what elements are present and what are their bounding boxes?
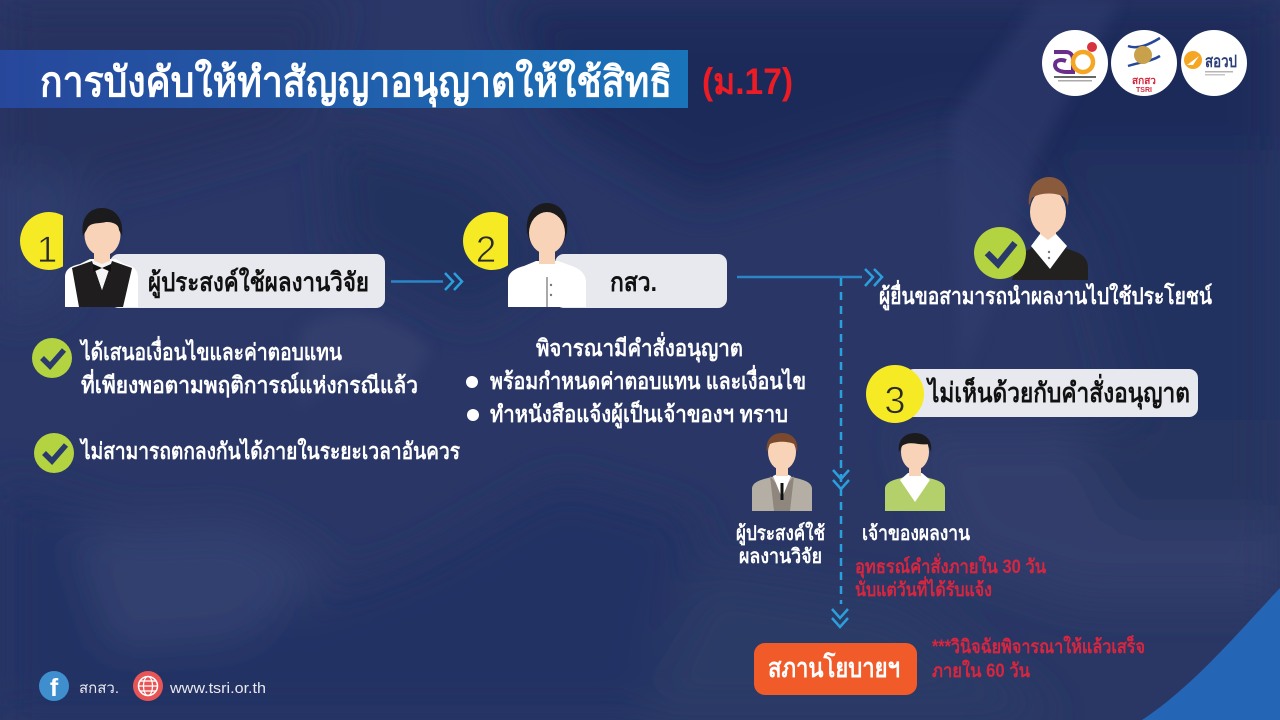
policy board box xyxy=(754,643,917,695)
applicant text: ผู้ยื่นขอสามารถนำผลงานไปใช้ประโยชน์ xyxy=(879,279,1212,311)
icon: globe xyxy=(133,671,163,701)
check item 1: ได้เสนอเงื่อนไขและค่าตอบแทน xyxy=(78,335,342,365)
arrow: step 2 to applicant xyxy=(737,269,882,286)
number badge 2: 2 xyxy=(476,229,496,270)
footer xyxy=(39,671,266,702)
bullet 2: ทำหนังสือแจ้งผู้เป็นเจ้าของฯ ทราบ xyxy=(490,399,788,429)
arrow: step 1 to step 2 xyxy=(391,273,462,290)
step 3 panel xyxy=(866,365,1198,423)
section reference: (ม.17) xyxy=(702,61,793,102)
icon: official person xyxy=(508,203,586,307)
title banner xyxy=(0,50,688,108)
icon: approved check xyxy=(974,227,1026,279)
logos xyxy=(1042,30,1247,96)
policy board box: สภานโยบายฯ xyxy=(768,651,900,683)
icon: facebook: f xyxy=(50,674,59,702)
check item 2: ไม่สามารถตกลงกันได้ภายในระยะเวลาอันควร xyxy=(79,437,461,464)
check item 1: ที่เพียงพอตามพฤติการณ์แห่งกรณีแล้ว xyxy=(81,368,418,398)
bullet 1: พร้อมกำหนดค่าตอบแทน และเงื่อนไข xyxy=(490,364,806,394)
label text: กสว. xyxy=(610,267,657,297)
number badge 1: 1 xyxy=(37,229,57,270)
applicant outcome xyxy=(879,177,1212,311)
number badge 2 xyxy=(463,212,508,270)
appeal note: อุทธรณ์คำสั่งภายใน 30 วัน xyxy=(855,553,1046,579)
logo: TSRI xyxy=(1111,30,1177,96)
icon: applicant person xyxy=(1012,177,1088,280)
icon: person in grey suit xyxy=(752,433,812,511)
logo: anniversary xyxy=(1042,30,1108,96)
icon: waiter person xyxy=(65,208,138,307)
label text: ไม่เห็นด้วยกับคำสั่งอนุญาต xyxy=(925,373,1190,410)
appeal note xyxy=(855,553,1046,601)
deadline note xyxy=(932,634,1145,682)
number badge 3: 3 xyxy=(884,380,906,422)
check item 1 xyxy=(32,335,418,398)
label text: ผู้ประสงค์ใช้ผลงานวิจัย xyxy=(148,267,369,299)
bottom right blue corner xyxy=(1142,588,1280,720)
party: research user xyxy=(736,433,825,568)
party: research user: ผลงานวิจัย xyxy=(739,546,822,568)
check item 2 xyxy=(34,433,461,473)
appeal note: นับแต่วันที่ได้รับแจ้ง xyxy=(855,576,992,601)
decision heading: พิจารณามีคำสั่งอนุญาต xyxy=(536,331,743,363)
logo: TSRI: สกสว xyxy=(1132,76,1156,87)
icon: facebook xyxy=(39,671,69,702)
party: work owner xyxy=(862,433,970,545)
dashed arrow: down to appeal xyxy=(832,278,849,627)
label box xyxy=(905,369,1198,417)
title text: การบังคับให้ทำสัญญาอนุญาตให้ใช้สิทธิ xyxy=(40,58,672,108)
number badge 1 xyxy=(20,212,63,270)
logo: agency: สอวป xyxy=(1205,52,1237,71)
logo: TSRI: TSRI xyxy=(1136,87,1152,94)
step 1 panel xyxy=(20,208,461,473)
logo: agency xyxy=(1181,30,1247,96)
label box xyxy=(110,254,385,308)
step 2 panel xyxy=(463,203,806,429)
label box xyxy=(555,254,727,308)
number badge 3 xyxy=(866,365,924,423)
party label: ผู้ประสงค์ใช้ xyxy=(736,521,825,547)
website: www.tsri.or.th xyxy=(169,680,266,697)
facebook label: สกสว. xyxy=(79,680,119,697)
deadline note: ***วินิจฉัยพิจารณาให้แล้วเสร็จ xyxy=(932,634,1145,658)
icon: person in green sweater xyxy=(885,433,945,511)
party label: เจ้าของผลงาน xyxy=(862,522,970,545)
deadline note: ภายใน 60 วัน xyxy=(932,659,1030,682)
